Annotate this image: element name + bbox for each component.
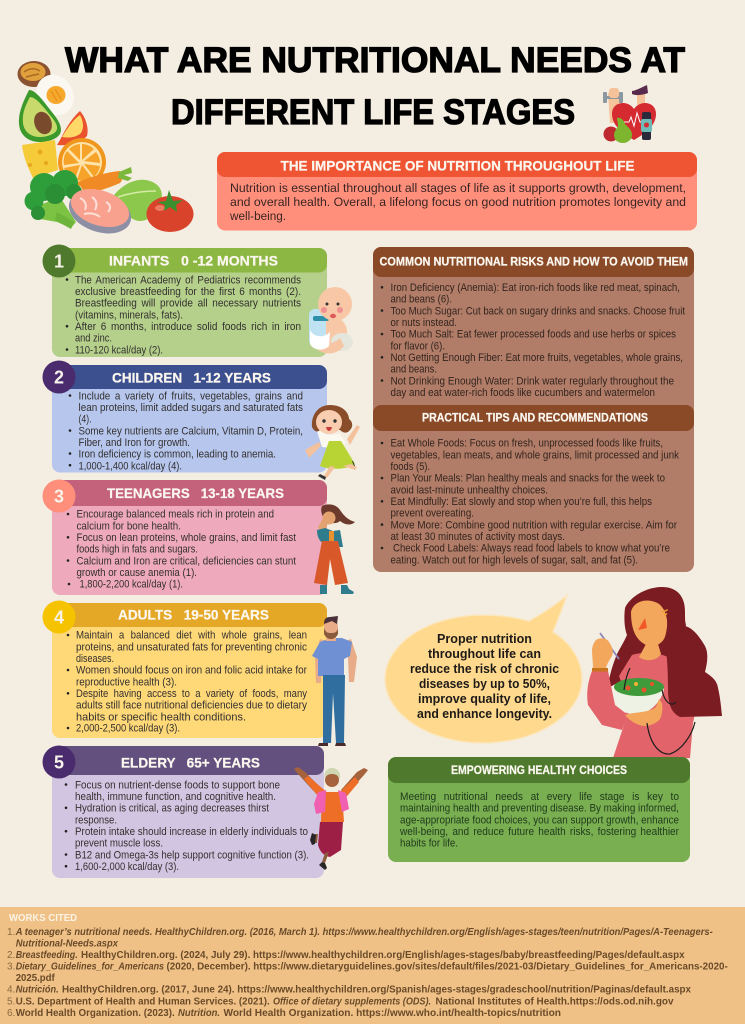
tips text: Plan Your Meals: Plan healthy meals and snacks for the week to [390, 473, 665, 485]
title [65, 40, 685, 132]
callout: speech bubble [385, 595, 582, 743]
adults text: Women should focus on iron and folic acid intake for [76, 665, 307, 677]
children text: Include a variety of fruits, vegetables, grains and [78, 390, 303, 402]
icon: arm with dumbbell [603, 88, 623, 123]
neck [639, 644, 661, 660]
risks text: Not Drinking Enough Water: Drink water regularly throughout the [390, 375, 674, 387]
heading bar [373, 247, 694, 277]
conclusion text: Meeting nutritional needs at every life stage is key to [400, 791, 679, 803]
conclusion text: well-being, and reduce future health risks, fostering healthier [399, 826, 679, 838]
icon: heart fitness illustration [603, 85, 656, 143]
heading bar [52, 365, 327, 389]
teenagers text: foods high in fats and sugars. [76, 544, 198, 556]
elderly text: Protein intake should increase in elderly individuals to [75, 826, 308, 838]
adults text: 2,000-2,500 kcal/day (3). [76, 723, 180, 735]
infants text: Breastfeeding will provide all necessary nutrients [75, 298, 301, 310]
teenagers text: Encourage balanced meals rich in protein and [76, 509, 274, 521]
panel background [0, 907, 745, 1024]
citations list: National Institutes of Health.https://ods.od.nih.gov [436, 996, 674, 1007]
tips text: Move More: Combine good nutrition with regular exercise. Aim for [390, 519, 677, 531]
children text: (4). [78, 414, 92, 426]
icon: food group illustration [18, 61, 194, 241]
nose [638, 618, 647, 630]
hand and fork [592, 633, 619, 668]
citations list: HealthyChildren.org. (2017, June 24). https://www.healthychildren.org/Spanish/ages-stages/gradeschool/nutrition/Paginas/default.aspx [62, 985, 691, 996]
risks text: Too Much Sugar: Cut back on sugary drinks and snacks. Choose fruit [390, 305, 685, 317]
heading bar: COMMON NUTRITIONAL RISKS AND HOW TO AVOID THEM [380, 255, 688, 269]
teenagers text: Calcium and Iron are critical, deficiencies can stunt [76, 555, 296, 567]
bubble text: throughout life can [428, 647, 541, 661]
icon: adult man [312, 616, 357, 746]
icon: avocado [19, 90, 61, 142]
citations list: Office of dietary supplements (ODS). [273, 996, 431, 1007]
tips text: eating. Watch out for high levels of sugar, salt, and fat (5). [390, 554, 638, 566]
panel body [388, 757, 690, 862]
icon: broccoli [24, 170, 82, 229]
number badge: 5 [54, 752, 64, 772]
adults text: habits or specific health conditions. [76, 711, 246, 723]
sleeve [587, 671, 628, 730]
children text: 1,000-1,400 kcal/day (4). [78, 460, 182, 472]
risks text: Iron Deficiency (Anemia): Eat iron-rich foods like red meat, spinach, [390, 282, 680, 294]
tips text: Eat Mindfully: Eat slowly and stop when you’re full, this helps [390, 496, 652, 508]
risks text: for flavor (6). [390, 340, 445, 352]
salad bowl [613, 678, 664, 715]
citations list [7, 927, 728, 1019]
heading bar [217, 152, 697, 177]
citations list: (2020, December). https://www.dietaryguidelines.gov/sites/default/files/2021-03/Dietary_Guidelines_for_Americans-2020- [166, 962, 728, 972]
teenagers text: Focus on lean proteins, whole grains, and limit fast [76, 532, 296, 544]
risks text: day and eat water-rich foods like cucumbers and watermelon [390, 387, 655, 399]
tips text: Check Food Labels: Always read food labels to know what you’re [393, 543, 670, 555]
heading bar [52, 480, 327, 506]
adults text [67, 630, 308, 735]
elderly text [65, 779, 309, 873]
teenagers text [67, 509, 296, 591]
icon: egg [29, 68, 81, 122]
works cited heading: WORKS CITED [9, 913, 77, 924]
intro text: well-being. [229, 209, 286, 223]
icon: elderly woman dancing [294, 767, 368, 870]
citations list: 2025.pdf [16, 973, 55, 984]
heading bar: CHILDREN 1-12 YEARS [112, 370, 271, 386]
citations list: 3. [7, 962, 15, 972]
panel body [217, 152, 697, 230]
risks text: Too Much Salt: Eat fewer processed foods and use herbs or spices [390, 329, 676, 341]
teenagers text: 1,800-2,200 kcal/day (1). [80, 579, 183, 591]
icon: baby with bottle [309, 287, 353, 353]
panel body [52, 248, 327, 357]
tips text: prevent overeating. [390, 508, 474, 520]
panel: empowering healthy choices [388, 757, 690, 862]
panel body [52, 480, 327, 595]
elderly text: Focus on nutrient-dense foods to support bone [75, 779, 280, 791]
infants text: exclusive breastfeeding for the first 6 months (2). [75, 286, 301, 298]
elderly text: 1,600-2,000 kcal/day (3). [75, 861, 179, 873]
heading bar: EMPOWERING HEALTHY CHOICES [451, 763, 627, 777]
lower hand [625, 699, 662, 726]
conclusion text: age-appropriate food choices, you can support growth, enhance [400, 814, 679, 826]
elderly text: Hydration is critical, as aging decreases thirst [75, 803, 269, 815]
citations list: 6. [7, 1008, 15, 1019]
adults text: diseases. [76, 653, 114, 665]
tips text: vegetables, lean meats, and whole grains, limit processed and junk [390, 449, 680, 461]
conclusion text: habits for life. [400, 838, 458, 850]
panel: teenagers [42, 480, 355, 595]
intro text [229, 181, 686, 223]
children text [69, 390, 303, 472]
risks text [381, 282, 685, 399]
risks text: Not Getting Enough Fiber: Eat more fruits, vegetables, whole grains, [390, 352, 683, 364]
icon: salmon [63, 182, 137, 241]
icon: orange [58, 138, 106, 186]
citations list: Nutrición. [16, 985, 59, 996]
icon: teenage girl [314, 504, 355, 594]
bubble text: and enhance longevity. [417, 707, 552, 721]
number badge [42, 480, 76, 512]
citations list: Breastfeeding. [16, 950, 78, 961]
tips text: Eat Whole Foods: Focus on fresh, unprocessed foods like fruits, [390, 438, 663, 450]
conclusion text [399, 791, 679, 850]
citations list: Dietary_Guidelines_for_Americans [16, 962, 164, 972]
citations list: Nutrition. [178, 1008, 220, 1019]
bubble shape [385, 595, 582, 743]
conclusion text: maintaining health and preventing disease. By making informed, [400, 803, 679, 815]
number badge [42, 360, 76, 394]
icon: fitness watch [641, 112, 652, 140]
number badge: 4 [54, 608, 64, 628]
teenagers text: growth or cause anemia (1). [76, 567, 197, 579]
icon: carrot [78, 167, 132, 192]
bubble text: reduce the risk of chronic [410, 662, 559, 676]
icon: lettuce [114, 180, 162, 221]
number badge: 3 [54, 486, 64, 506]
panel: importance of nutrition [217, 152, 697, 230]
children text: Iron deficiency is common, leading to anemia. [78, 449, 276, 461]
number badge: 2 [54, 368, 64, 388]
adults text: Maintain a balanced diet with whole grains, lean [76, 630, 307, 642]
icon: leg with shoe [632, 85, 648, 116]
bubble text [410, 632, 559, 721]
intro text: Nutrition is essential throughout all stages of life as it supports growth, development, [230, 181, 686, 195]
children text: Some key nutrients are Calcium, Vitamin D, Protein, [78, 425, 303, 437]
icon: heart [612, 103, 656, 140]
elderly text: response. [75, 814, 117, 826]
icon: woman eating salad [587, 587, 722, 758]
heading bar [373, 405, 694, 431]
infants text: After 6 months, introduce solid foods rich in iron [75, 321, 301, 333]
adults text: proteins, and unsaturated fats for preventing chronic [76, 641, 308, 653]
heading bar [388, 757, 690, 783]
citations list: 1. [7, 927, 15, 938]
panel: risks and tips [373, 247, 694, 572]
infants text: (vitamins, minerals, fats). [75, 309, 183, 321]
intro text: and overall health. Overall, a lifelong focus on good nutrition promotes longevity and [230, 195, 686, 209]
panel: infants [42, 244, 353, 357]
elderly text: health, immune function, and cognitive health. [75, 791, 276, 803]
number badge [42, 600, 76, 634]
panel: works cited [0, 907, 745, 1024]
heading bar: PRACTICAL TIPS AND RECOMMENDATIONS [422, 410, 648, 424]
icon: tomato [146, 190, 194, 232]
bubble text: diseases by up to 50%, [419, 677, 550, 691]
heading bar: ADULTS 19-50 YEARS [118, 606, 269, 622]
children text: lean proteins, limit added sugars and saturated fats [78, 402, 303, 414]
risks text: or nuts instead. [390, 317, 457, 329]
heading bar: TEENAGERS 13-18 YEARS [107, 485, 284, 501]
back hair [608, 587, 686, 688]
wrist band [592, 668, 608, 672]
panel: elderly [42, 746, 368, 878]
infants text: 110-120 kcal/day (2). [75, 344, 163, 356]
risks text: and beans. [390, 364, 437, 376]
icon: pulse line [622, 113, 648, 126]
number badge [42, 244, 76, 278]
front hair [661, 588, 722, 717]
citations list: 2. [7, 950, 15, 961]
infants text [66, 274, 301, 356]
icon: apple [604, 126, 618, 142]
panel: common nutritional risks [373, 247, 694, 399]
elderly text: B12 and Omega-3s help support cognitive function (3). [75, 849, 309, 861]
number badge [42, 746, 76, 778]
hair pin [662, 608, 674, 615]
teenagers text: calcium for bone health. [76, 520, 181, 532]
necklace cord [624, 668, 695, 754]
adults text: reproductive health (3). [76, 676, 177, 688]
heading bar: ELDERY 65+ YEARS [121, 754, 260, 770]
citations list: World Health Organization. https://www.who.int/health-topics/nutrition [224, 1008, 561, 1019]
bubble text: improve quality of life, [418, 692, 551, 706]
heading bar [52, 603, 327, 627]
risks text: and beans (6). [390, 294, 452, 306]
panel: adults [42, 600, 357, 746]
icon: pear [614, 118, 632, 143]
bubble text: Proper nutrition [437, 632, 532, 646]
tips text: avoid last-minute unhealthy choices. [390, 484, 548, 496]
tips text: at least 30 minutes of activity most days. [390, 531, 565, 543]
citations list: 4. [7, 985, 15, 996]
heading bar [52, 248, 327, 272]
citations list: HealthyChildren.org. (2024, July 29). https://www.healthychildren.org/English/ages-stages/baby/breastfeeding/Pages/default.aspx [81, 950, 685, 961]
panel: practical tips [373, 405, 694, 566]
tips text: foods (5). [390, 461, 430, 473]
icon: walnut [18, 61, 50, 87]
adults text: Despite having access to a variety of foods, many [76, 688, 308, 700]
citations list: Nutritional-Needs.aspx [16, 938, 118, 950]
heading bar: INFANTS 0 -12 MONTHS [109, 252, 278, 268]
icon: cheese [22, 140, 58, 178]
sweater torso [613, 653, 696, 758]
infants text: The American Academy of Pediatrics recommends [75, 274, 301, 286]
panel body [52, 746, 324, 878]
heading bar [52, 746, 324, 775]
panel body [52, 365, 327, 472]
panel: children [42, 360, 327, 472]
heading bar: THE IMPORTANCE OF NUTRITION THROUGHOUT LIFE [280, 158, 634, 174]
infants text: and zinc. [75, 333, 112, 345]
citations list: 5. [7, 996, 15, 1007]
citations list: A teenager’s nutritional needs. HealthyChildren.org. (2016, March 1). https://www.healthychildren.org/English/ages-stages/teen/nutrition/Pages/A-Teenagers- [15, 927, 713, 938]
adults text: adults still face nutritional deficiencies due to dietary [76, 700, 308, 712]
citations list: U.S. Department of Health and Human Services. (2021). [16, 996, 270, 1007]
title: DIFFERENT LIFE STAGES [171, 92, 575, 132]
icon: young girl [305, 405, 360, 480]
panel body [373, 247, 694, 572]
number badge: 1 [54, 252, 64, 272]
title: WHAT ARE NUTRITIONAL NEEDS AT [65, 40, 685, 80]
citations list: World Health Organization. (2023). [16, 1008, 175, 1019]
tips text [381, 438, 680, 566]
elderly text: prevent muscle loss. [75, 838, 163, 850]
panel body [52, 603, 327, 738]
face [631, 600, 667, 646]
icon: peach slice [57, 111, 88, 145]
children text: Fiber, and Iron for growth. [78, 437, 190, 449]
